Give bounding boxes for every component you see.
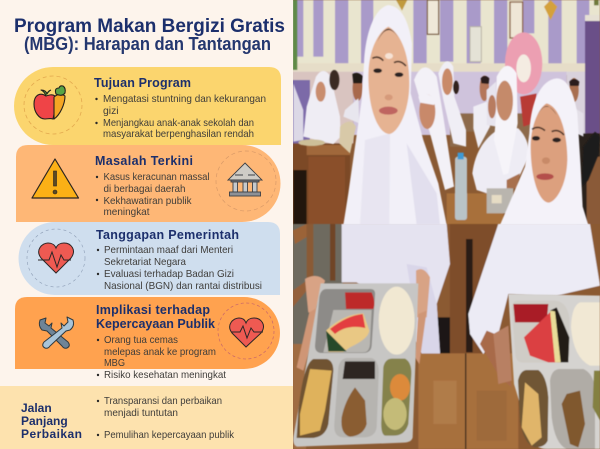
heading: Jalan Panjang Perbaikan: Panjang [21,414,68,428]
heading: Jalan Panjang Perbaikan [21,401,82,441]
bullets: Tujuan Program [95,94,266,140]
panel: Implikasi terhadap Kepercayaan Publik [15,297,280,381]
bullets: Masalah Terkini: di berbagai daerah [104,184,186,195]
bullets: Implikasi: MBG [104,358,125,369]
icon: heart with pulse [230,318,263,347]
panel: Tanggapan Pemerintah [19,222,280,295]
heading: Tujuan Program: Tujuan Program [94,76,191,90]
icon: government building [228,163,262,196]
bullets: Masalah Terkini: meningkat [104,207,150,218]
heading: Masalah Terkini: Masalah Terkini [95,154,193,168]
panel: Tujuan Program [14,67,281,145]
photo: background students [293,61,600,225]
title: (MBG): Harapan dan Tantangan [24,34,271,54]
title: Program Makan Bergizi Gratis [14,15,285,37]
bullets: Implikasi: Orang tua cemas [104,335,178,346]
bullets: Masalah Terkini [96,172,210,218]
icon: crossed wrenches [39,317,74,348]
icon: apple and carrot [34,86,65,119]
bullets: Tujuan Program: Mengatasi stuntning dan kekurangan [103,94,266,105]
bullets: Implikasi: Risiko kesehatan meningkat [104,370,226,381]
photo: lower scene with trays [290,224,600,449]
bullets: Masalah Terkini: Kekhawatiran publik [104,196,192,207]
bullets: Tujuan Program: masyarakat berpenghasilan rendah [103,129,254,140]
heading: Implikasi terhadap Kepercayaan Publik: Implikasi terhadap [96,303,210,317]
bullets: Tujuan Program: Menjangkau anak-anak sekolah dan [103,118,254,129]
bullets: Jalan Panjang Perbaikan [97,396,235,441]
heading: Jalan Panjang Perbaikan: Perbaikan [21,427,82,441]
icon: heart with pulse [38,243,73,273]
bullets: Tanggapan Pemerintah [97,245,262,292]
bullets: Jalan Panjang Perbaikan: Transparansi dan perbaikan [104,396,222,407]
bullets: Jalan Panjang Perbaikan: Pemulihan kepercayaan publik [104,430,235,441]
photo: classroom background [290,0,600,225]
bullets: Tanggapan Pemerintah: Permintaan maaf dari Menteri [104,245,233,256]
heading: Implikasi terhadap Kepercayaan Publik [96,303,215,331]
photo: right food tray [508,294,600,449]
panel: Jalan Panjang Perbaikan [0,386,293,449]
title [14,15,285,54]
bullets: Implikasi: melepas anak ke program [104,347,216,358]
panel: Masalah Terkini [16,145,280,222]
icon: warning triangle [32,159,78,198]
bullets: Tanggapan Pemerintah: Nasional (BGN) dan rantai distribusi [104,281,262,292]
bullets: Tanggapan Pemerintah: Sekretariat Negara [104,257,186,268]
bullets: Tanggapan Pemerintah: Evaluasi terhadap Badan Gizi [104,269,234,280]
bullets: Implikasi [97,335,226,381]
heading: Implikasi terhadap Kepercayaan Publik: Kepercayaan Publik [96,317,215,331]
bullets: Jalan Panjang Perbaikan: menjadi tuntutan [104,408,178,419]
photo: left food tray [293,283,418,447]
bullets: Tujuan Program: gizi [103,106,119,117]
photo: front-right girl with hijab [500,78,588,225]
bullets: Masalah Terkini: Kasus keracunan massal [104,172,210,183]
heading: Jalan Panjang Perbaikan: Jalan [21,401,52,415]
photo: students holding lunch trays [290,0,600,449]
photo: main girl with hijab [343,5,447,225]
heading: Tanggapan Pemerintah: Tanggapan Pemerintah [96,228,239,242]
